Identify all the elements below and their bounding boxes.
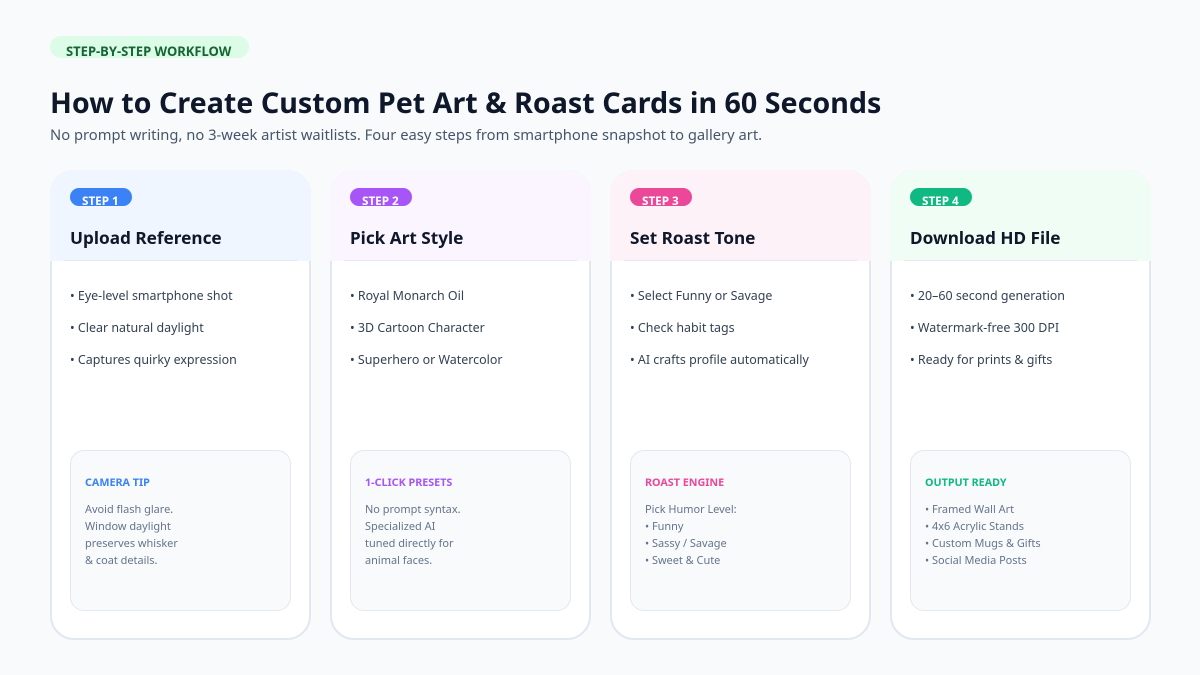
bullet: generation time: • 20–60 second generation bbox=[910, 287, 1065, 304]
callout text: animal faces. bbox=[365, 553, 432, 568]
callout text: • 4x6 Acrylic Stands bbox=[925, 519, 1024, 534]
panel: step 4 bbox=[890, 170, 1151, 640]
bullet: superhero: • Superhero or Watercolor bbox=[350, 351, 503, 368]
callout text: • Custom Mugs & Gifts bbox=[925, 536, 1041, 551]
heading: download hd file: Download HD File bbox=[910, 227, 1061, 250]
card header: download hd file bbox=[890, 170, 1151, 261]
callout: camera tip bbox=[70, 450, 291, 611]
bullet: daylight: • Clear natural daylight bbox=[70, 319, 204, 336]
bullet: expression: • Captures quirky expression bbox=[70, 351, 237, 368]
card header: upload reference bbox=[50, 170, 311, 261]
badge: step-by-step workflow bbox=[50, 36, 249, 58]
callout title: ROAST ENGINE bbox=[645, 476, 724, 490]
callout text: Specialized AI bbox=[365, 519, 435, 534]
callout text: • Sassy / Savage bbox=[645, 536, 727, 551]
step 1 pill bbox=[70, 188, 132, 206]
panel: step 3 bbox=[610, 170, 871, 640]
callout title: OUTPUT READY bbox=[925, 476, 1007, 490]
callout text: tuned directly for bbox=[365, 536, 454, 551]
callout text bbox=[85, 502, 178, 568]
panel: step 1 bbox=[50, 170, 311, 640]
callout text bbox=[365, 502, 461, 568]
callout text: No prompt syntax. bbox=[365, 502, 461, 517]
heading: upload reference: Upload Reference bbox=[70, 227, 222, 250]
callout: output ready bbox=[910, 450, 1131, 611]
bullet: 3d cartoon: • 3D Cartoon Character bbox=[350, 319, 485, 336]
callout text: • Sweet & Cute bbox=[645, 553, 720, 568]
callout title: CAMERA TIP bbox=[85, 476, 150, 490]
callout text bbox=[925, 502, 1041, 568]
bullet: eye-level shot: • Eye-level smartphone shot bbox=[70, 287, 233, 304]
card header: pick art style bbox=[330, 170, 591, 261]
bullet: watermark-free: • Watermark-free 300 DPI bbox=[910, 319, 1059, 336]
callout text: Avoid flash glare. bbox=[85, 502, 173, 517]
heading: pick art style: Pick Art Style bbox=[350, 227, 463, 250]
callout text: & coat details. bbox=[85, 553, 157, 568]
step 2 pill bbox=[350, 188, 412, 206]
callout title: 1-CLICK PRESETS bbox=[365, 476, 452, 490]
card header: set roast tone bbox=[610, 170, 871, 261]
callout text: • Funny bbox=[645, 519, 684, 534]
callout text bbox=[645, 502, 737, 568]
callout: roast engine bbox=[630, 450, 851, 611]
heading: set roast tone: Set Roast Tone bbox=[630, 227, 755, 250]
bullet: royal monarch: • Royal Monarch Oil bbox=[350, 287, 464, 304]
subtitle: No prompt writing, no 3-week artist waitlists. Four easy steps from smartphone snapshot to gallery art. bbox=[50, 125, 762, 145]
step 4 pill bbox=[910, 188, 972, 206]
bullet: habit tags: • Check habit tags bbox=[630, 319, 735, 336]
step 3 pill bbox=[630, 188, 692, 206]
callout text: • Social Media Posts bbox=[925, 553, 1027, 568]
bullet: ai profile: • AI crafts profile automatically bbox=[630, 351, 809, 368]
bullet: prints and gifts: • Ready for prints & gifts bbox=[910, 351, 1052, 368]
callout text: Pick Humor Level: bbox=[645, 502, 737, 517]
callout text: preserves whisker bbox=[85, 536, 178, 551]
callout text: Window daylight bbox=[85, 519, 171, 534]
bullet: funny or savage: • Select Funny or Savage bbox=[630, 287, 772, 304]
panel: step 2 bbox=[330, 170, 591, 640]
callout: 1-click presets bbox=[350, 450, 571, 611]
callout text: • Framed Wall Art bbox=[925, 502, 1014, 517]
title: How to Create Custom Pet Art & Roast Cards in 60 Seconds bbox=[50, 83, 881, 122]
